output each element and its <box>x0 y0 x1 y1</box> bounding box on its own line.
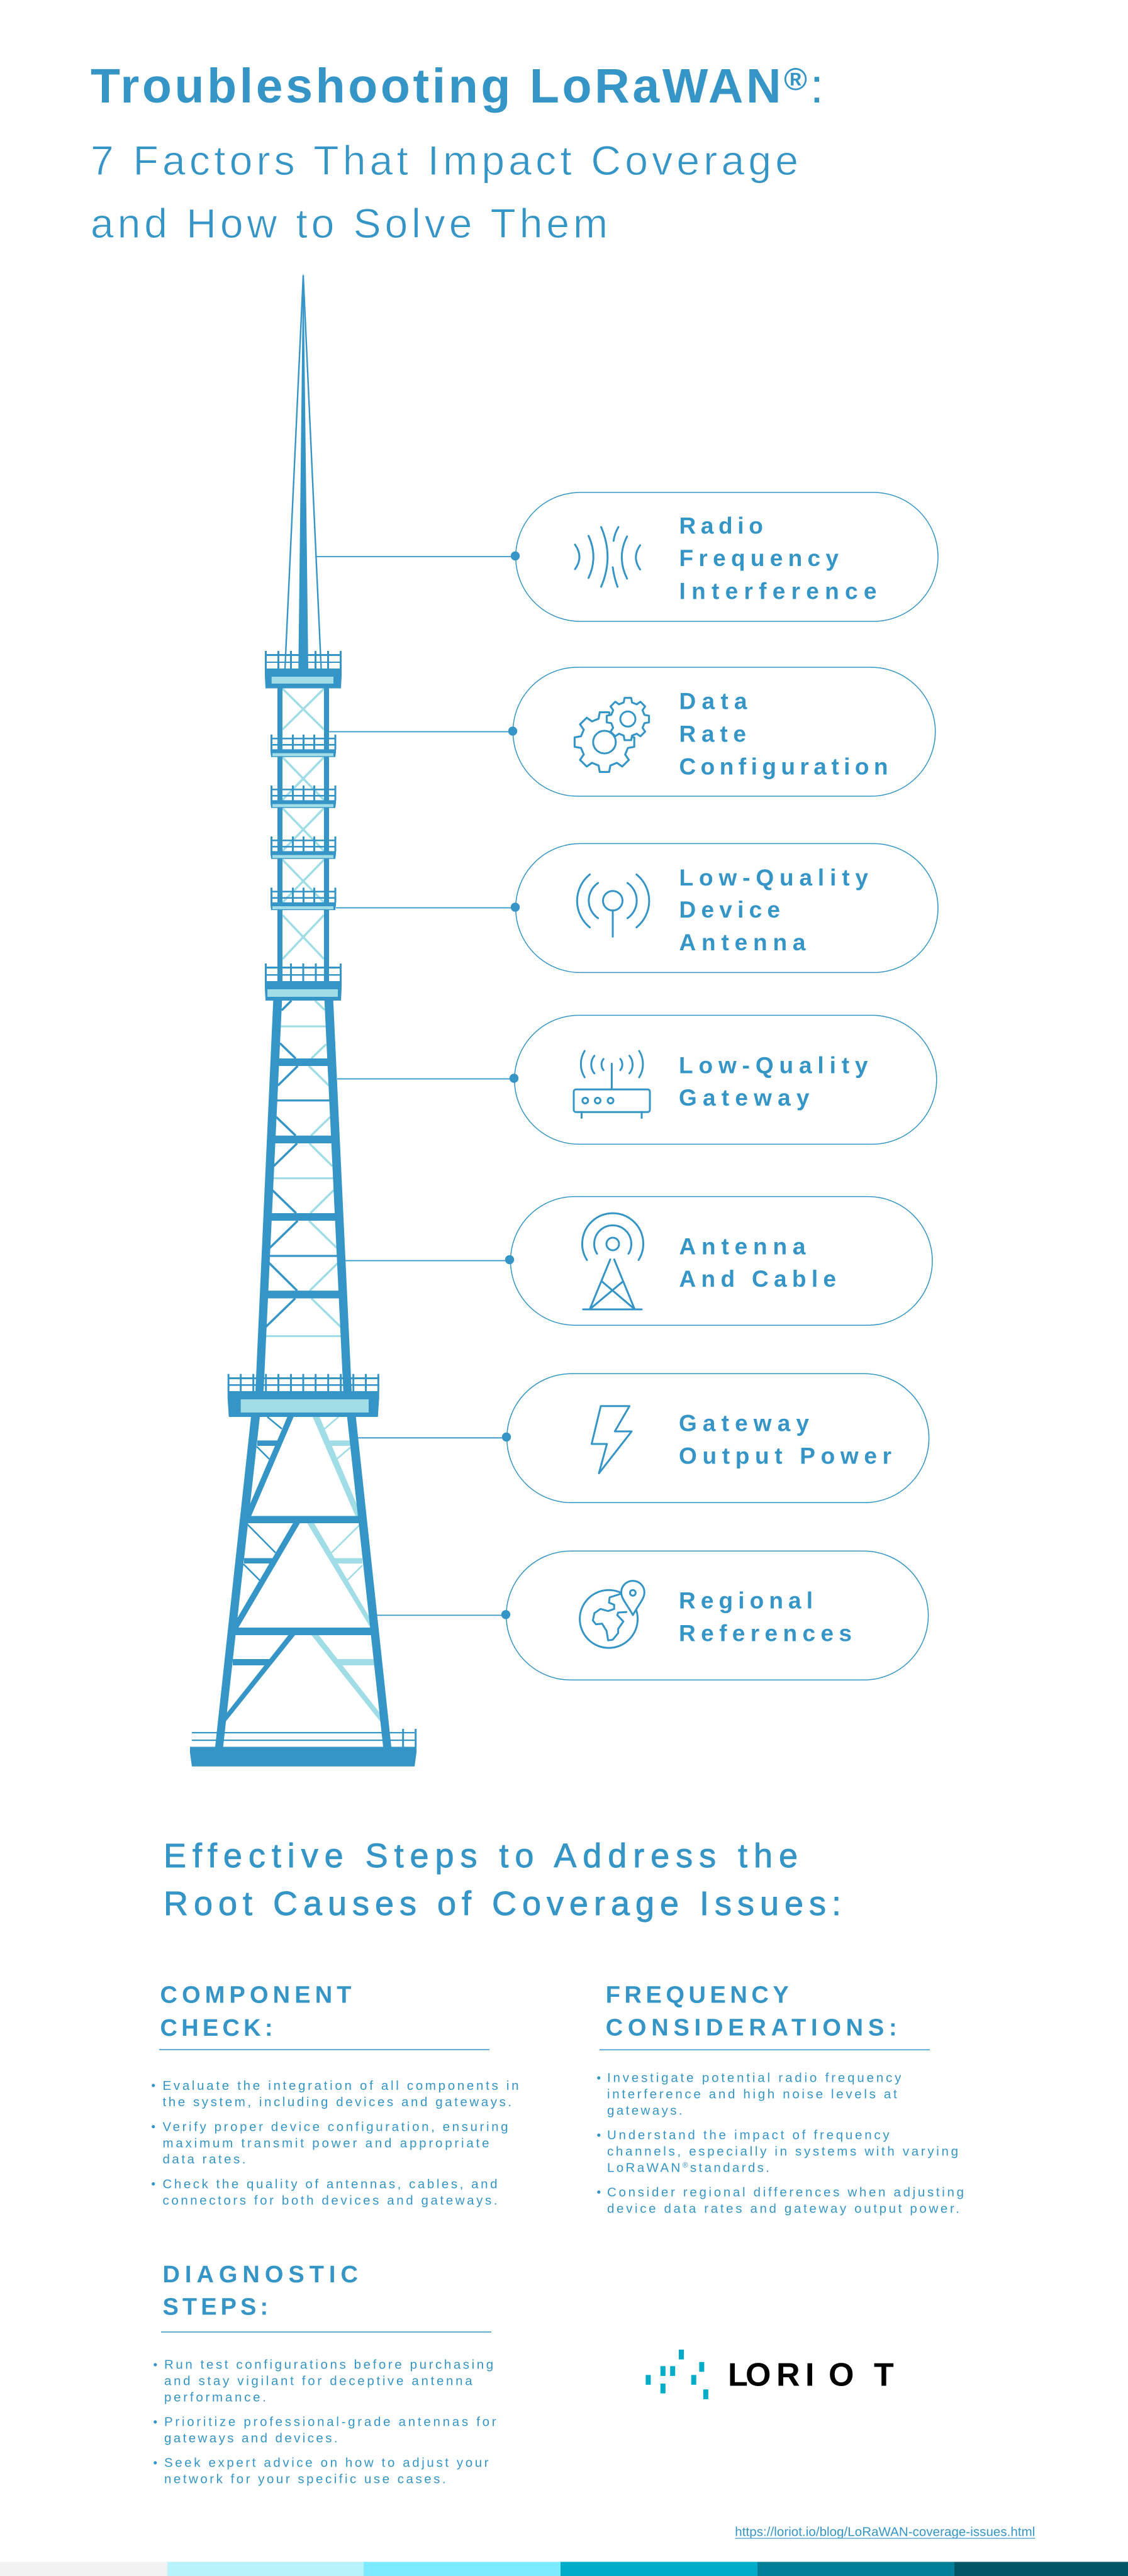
panel: antenna and cable: And Cable <box>679 1266 836 1292</box>
title: ® <box>784 62 807 97</box>
bullet list: frequency considerations: channels, especially in systems with varying <box>607 2145 958 2159</box>
bullet list: frequency considerations: gateways. <box>607 2103 683 2118</box>
bullet list: component check: the system, including devices and gateways. <box>162 2095 511 2109</box>
bullet list: diagnostic steps: network for your specific use cases. <box>164 2472 446 2486</box>
heading: effective steps <box>164 1837 841 1923</box>
panel: frequency considerations <box>597 1982 964 2216</box>
bullet list: diagnostic steps: performance. <box>164 2390 266 2404</box>
panel: component check: COMPONENT <box>160 1982 351 2009</box>
connector: low-quality gateway <box>337 1074 518 1083</box>
bullet list: frequency considerations: Consider regional differences when adjusting <box>607 2185 964 2199</box>
tower middle platform <box>265 963 342 1001</box>
bullet list: diagnostic steps: Run test configurations before purchasing <box>164 2358 493 2372</box>
panel: gateway output power <box>507 1374 929 1502</box>
icon: logo ticks <box>645 2350 708 2399</box>
panel: low-quality device antenna: Antenna <box>679 930 806 955</box>
panel: low-quality device antenna: Device <box>679 897 780 923</box>
icon: gateway router <box>574 1051 650 1118</box>
bullet list: frequency considerations: device data rates and gateway output power. <box>607 2201 959 2216</box>
tower small platform 1 <box>271 735 336 757</box>
title: : <box>810 59 824 113</box>
panel: regional references <box>506 1551 929 1680</box>
title: 7 Factors That Impact Coverage <box>91 137 798 184</box>
title <box>91 59 824 247</box>
bullet list: frequency considerations: Understand the impact of frequency <box>607 2128 890 2143</box>
title: and How to Solve Them <box>91 200 608 247</box>
connector: antenna and cable <box>345 1255 514 1264</box>
icon: antenna tower <box>583 1213 643 1309</box>
bullet list: diagnostic steps: and stay vigilant for deceptive antenna <box>164 2373 472 2388</box>
connector: regional references <box>377 1610 510 1619</box>
bullet list: component check: data rates. <box>162 2152 245 2167</box>
panel: gateway output power: Gateway <box>679 1411 809 1436</box>
bullet list: component check <box>152 2079 518 2207</box>
bullet list: diagnostic steps: Prioritize professional-grade antennas for <box>164 2414 496 2429</box>
bullet list: frequency considerations: LoRaWAN <box>607 2160 680 2175</box>
tower top platform <box>265 651 342 688</box>
tower upper shaft <box>277 688 329 981</box>
logo: LORIOT: LORIOT <box>728 2357 894 2394</box>
bullet list: frequency considerations <box>597 2071 964 2216</box>
panel: data rate configuration: Data <box>679 688 747 714</box>
bullet list: component check: Check the quality of antennas, cables, and <box>162 2177 497 2191</box>
panel: radio frequency interference: Frequency <box>679 545 839 571</box>
bullet list: frequency considerations: interference and high noise levels at <box>607 2087 897 2102</box>
tower mid section <box>255 1001 352 1391</box>
panel: diagnostic steps: STEPS: <box>162 2294 268 2321</box>
panel: radio frequency interference <box>516 492 938 621</box>
heading: effective steps: Effective Steps to Address the <box>164 1837 798 1875</box>
connector: radio frequency interference <box>316 552 520 560</box>
bullet list: component check: Verify proper device configuration, ensuring <box>162 2119 508 2134</box>
bullet list: frequency considerations: Investigate potential radio frequency <box>607 2071 902 2085</box>
tower lower section <box>215 1417 391 1747</box>
panel: component check: CHECK: <box>160 2015 273 2041</box>
tower small platform 3 <box>271 836 336 859</box>
tower small platform 2 <box>271 786 336 808</box>
panel: antenna and cable: Antenna <box>679 1234 806 1259</box>
logo: LORIOT <box>645 2350 894 2399</box>
panel: regional references: References <box>679 1621 852 1646</box>
connector: low-quality device antenna <box>336 902 520 912</box>
connector: data rate configuration <box>329 726 517 736</box>
bullet list: diagnostic steps: gateways and devices. <box>164 2431 338 2445</box>
panel: gateway output power: Output Power <box>679 1443 891 1469</box>
bullet list: frequency considerations: standards. <box>690 2160 769 2175</box>
tower base <box>190 1729 416 1767</box>
bullet list: diagnostic steps: Seek expert advice on how to adjust your <box>164 2455 489 2470</box>
panel: data rate configuration: Configuration <box>679 754 888 780</box>
panel: frequency considerations: CONSIDERATIONS: <box>606 2015 897 2041</box>
panel: radio frequency interference: Radio <box>679 513 763 538</box>
tower spire <box>285 274 321 669</box>
panel: diagnostic steps: DIAGNOSTIC <box>162 2262 358 2288</box>
bullet list: diagnostic steps <box>154 2358 496 2486</box>
panel: data rate configuration: Rate <box>679 721 746 747</box>
footer colour bar <box>0 2562 1128 2576</box>
tower small platform 4 <box>271 887 336 910</box>
panel: low-quality gateway: Low-Quality <box>679 1053 868 1079</box>
bullet list: frequency considerations: ® <box>683 2160 688 2169</box>
icon: globe with pin <box>580 1581 644 1648</box>
panel: low-quality gateway: Gateway <box>679 1085 810 1111</box>
bullet list: component check: Evaluate the integration of all components in <box>162 2079 518 2093</box>
bullet list: component check: connectors for both devices and gateways. <box>162 2193 497 2207</box>
panel: low-quality gateway <box>515 1015 937 1144</box>
icon: lightning bolt <box>591 1406 632 1474</box>
panel: data rate configuration <box>513 667 935 796</box>
icon: radio waves <box>575 527 640 587</box>
icon: gears <box>574 698 649 772</box>
title: Troubleshooting LoRaWAN <box>91 59 781 113</box>
bullet list: component check: maximum transmit power and appropriate <box>162 2136 489 2151</box>
panel: regional references: Regional <box>679 1587 813 1613</box>
panel: antenna and cable <box>511 1197 932 1325</box>
heading: effective steps: Root Causes of Coverage Issues: <box>164 1885 841 1923</box>
panel: component check <box>152 1982 518 2207</box>
tower illustration <box>190 274 416 1767</box>
panel: radio frequency interference: Interference <box>679 578 877 604</box>
tower lower platform <box>228 1374 379 1417</box>
icon: device antenna <box>577 874 649 936</box>
connector: gateway output power <box>357 1433 511 1441</box>
panel: low-quality device antenna <box>516 843 938 972</box>
panel: diagnostic steps <box>154 2262 496 2486</box>
panel: frequency considerations: FREQUENCY <box>606 1982 789 2008</box>
panel: low-quality device antenna: Low-Quality <box>679 865 868 891</box>
source url: https://loriot.io/blog/LoRaWAN-coverage-issues.html <box>735 2525 1035 2540</box>
